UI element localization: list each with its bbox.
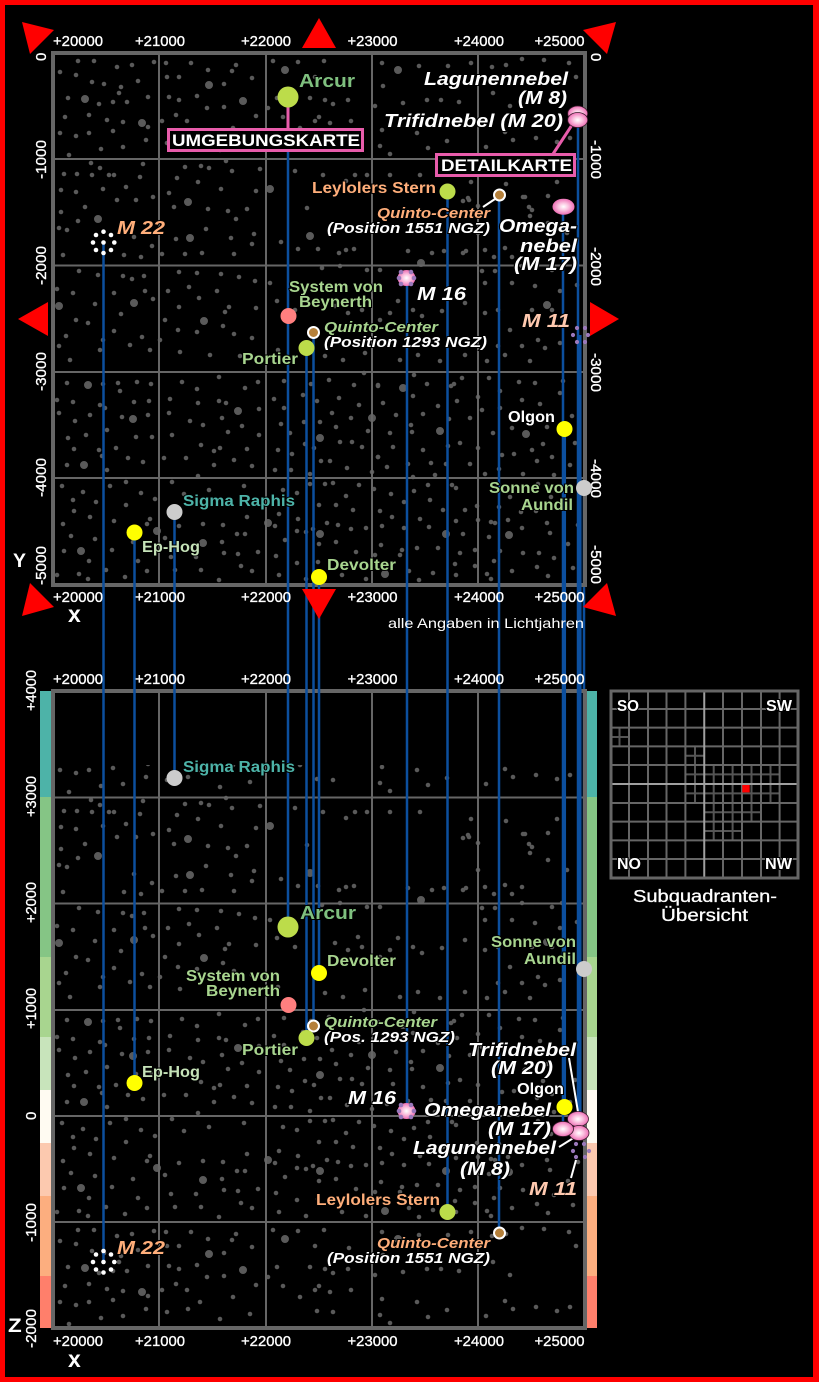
quadrant labels: NW bbox=[765, 856, 792, 873]
star: Olgon lower: Olgon bbox=[517, 1081, 564, 1098]
nebula: Trifidnebel lower: (M 20) bbox=[491, 1058, 553, 1078]
cluster: M 11 bbox=[522, 311, 590, 344]
star: Portier: Portier bbox=[242, 351, 298, 368]
nebula: Omeganebel bbox=[499, 199, 578, 274]
star: Devolter: Devolter bbox=[327, 557, 396, 574]
star: Olgon bbox=[508, 409, 572, 437]
nebula: Lagunennebel: Lagunennebel bbox=[424, 69, 569, 89]
star: System von Beynerth lower: System von bbox=[186, 968, 280, 985]
Quinto-Center 1293 lower bbox=[308, 1014, 455, 1046]
x axis labels XZ top: +21000 bbox=[135, 671, 185, 688]
x axis labels XZ bottom: +21000 bbox=[135, 1333, 185, 1350]
x axis labels XY bottom: +25000 bbox=[534, 589, 584, 606]
nebula: Lagunennebel lower: (M 8) bbox=[460, 1159, 510, 1179]
z axis labels: 0 bbox=[23, 1112, 40, 1120]
nebula: M 16: M 16 bbox=[417, 284, 467, 304]
z axis labels: -2000 bbox=[23, 1309, 40, 1348]
y axis labels right: -1000 bbox=[587, 140, 604, 179]
quadrant labels bbox=[617, 698, 792, 873]
star: System von Beynerth: System von bbox=[289, 279, 383, 296]
nebula: Omeganebel: Omega- bbox=[499, 216, 577, 236]
x axis labels XY bottom: +23000 bbox=[348, 589, 398, 606]
z axis labels: +2000 bbox=[23, 882, 40, 923]
star: Leylolers Stern lower bbox=[316, 1192, 456, 1220]
cluster: M 11: M 11 bbox=[522, 311, 570, 331]
cluster: M 22 lower bbox=[91, 1238, 165, 1275]
nebula: Lagunennebel: (M 8) bbox=[518, 88, 567, 108]
Quinto-Center 1551 lower: (Position 1551 NGZ) bbox=[327, 1250, 490, 1267]
x axis labels XY bottom: +21000 bbox=[135, 589, 185, 606]
cluster: M 22 bbox=[91, 218, 165, 255]
Quinto-Center 1551: Quinto-Center bbox=[377, 205, 491, 222]
y axis labels right: 0 bbox=[587, 53, 604, 61]
x axis labels XZ top: +23000 bbox=[348, 671, 398, 688]
x axis labels XZ top: +20000 bbox=[53, 671, 103, 688]
x axis labels XY top bbox=[53, 33, 584, 50]
detailkarte callout bbox=[436, 125, 574, 176]
star: Ep-Hog: Ep-Hog bbox=[142, 539, 200, 556]
quadrant labels: SW bbox=[766, 698, 792, 715]
star: Sigma Raphis lower bbox=[166, 759, 295, 786]
y axis labels left: -2000 bbox=[33, 246, 50, 285]
x axis labels XY top: +23000 bbox=[348, 33, 398, 50]
star: Olgon lower bbox=[517, 1081, 572, 1115]
y axis labels right: -5000 bbox=[587, 545, 604, 584]
x axis labels XY bottom: +22000 bbox=[241, 589, 291, 606]
x axis labels XY bottom bbox=[53, 589, 584, 606]
star: System von Beynerth lower bbox=[186, 968, 296, 1013]
star: Devolter lower bbox=[311, 953, 396, 981]
star: Portier lower bbox=[242, 1030, 314, 1059]
quadrant labels: NO bbox=[617, 856, 641, 873]
XY objects bbox=[91, 69, 592, 585]
position line: Sonne von Aundil bbox=[583, 488, 585, 969]
star: Ep-Hog lower: Ep-Hog bbox=[142, 1064, 200, 1081]
umgebungskarte callout: UMGEBUNGSKARTE bbox=[172, 131, 360, 150]
star: Arcur lower: Arcur bbox=[300, 902, 356, 923]
star: Portier bbox=[242, 340, 314, 368]
x axis labels XZ top: +24000 bbox=[454, 671, 504, 688]
y axis labels right: -3000 bbox=[587, 353, 604, 392]
x axis labels XZ bottom: +24000 bbox=[454, 1333, 504, 1350]
nebula: Omeganebel: nebel bbox=[520, 236, 578, 256]
z colour bar right bbox=[587, 691, 597, 1328]
x axis labels XZ bottom: +20000 bbox=[53, 1333, 103, 1350]
x axis labels XY top: +25000 bbox=[534, 33, 584, 50]
star: Sigma Raphis: Sigma Raphis bbox=[183, 493, 295, 510]
x axis labels XY top: +24000 bbox=[454, 33, 504, 50]
z axis labels: +1000 bbox=[23, 988, 40, 1029]
current sector marker bbox=[742, 785, 750, 792]
overview caption: Subquadranten- bbox=[633, 886, 777, 906]
x axis labels XY top: +22000 bbox=[241, 33, 291, 50]
star: Leylolers Stern bbox=[312, 180, 456, 200]
cluster: M 22 lower: M 22 bbox=[117, 1238, 165, 1258]
panel: XY grid bbox=[53, 53, 585, 585]
x axis labels XZ bottom: +25000 bbox=[534, 1333, 584, 1350]
x axis labels XY bottom: +24000 bbox=[454, 589, 504, 606]
star: Arcur lower bbox=[278, 902, 356, 938]
nebula: Omeganebel lower: Omeganebel bbox=[424, 1100, 552, 1120]
y axis labels left: -4000 bbox=[33, 458, 50, 497]
Quinto-Center 1293 bbox=[308, 319, 487, 351]
Quinto-Center 1293: Quinto-Center bbox=[324, 319, 439, 336]
y axis labels left: -5000 bbox=[33, 546, 50, 585]
x axis labels XZ bottom bbox=[53, 1333, 584, 1350]
panel: Subquadranten overview bbox=[610, 690, 798, 925]
z axis labels: +4000 bbox=[23, 670, 40, 711]
nebula: Lagunennebel bbox=[424, 69, 588, 121]
nebula: M 16 lower bbox=[348, 1088, 416, 1119]
note: units: alle Angaben in Lichtjahren bbox=[388, 615, 584, 631]
cluster: M 22: M 22 bbox=[117, 218, 165, 238]
panel: XZ grid bbox=[53, 691, 585, 1328]
star: System von Beynerth bbox=[280, 279, 383, 324]
z axis labels: +3000 bbox=[23, 776, 40, 817]
cluster: M 11 lower: M 11 bbox=[529, 1179, 577, 1199]
axis letter Z: Z bbox=[8, 1315, 22, 1337]
y axis labels left: -1000 bbox=[33, 140, 50, 179]
y axis labels right bbox=[587, 53, 604, 584]
x axis labels XZ top: +22000 bbox=[241, 671, 291, 688]
Quinto-Center 1293 lower: (Pos. 1293 NGZ) bbox=[324, 1029, 455, 1046]
star: Ep-Hog lower bbox=[126, 1064, 200, 1091]
Quinto-Center 1293: (Position 1293 NGZ) bbox=[324, 334, 487, 351]
Quinto-Center 1551 lower: Quinto-Center bbox=[377, 1235, 491, 1252]
star: System von Beynerth lower: Beynerth bbox=[206, 983, 280, 1000]
y axis labels left bbox=[33, 53, 50, 585]
x axis labels XZ top: +25000 bbox=[534, 671, 584, 688]
star: Arcur: Arcur bbox=[299, 70, 355, 91]
nebula: Trifidnebel: Trifidnebel (M 20) bbox=[384, 111, 563, 131]
x axis labels XZ bottom: +22000 bbox=[241, 1333, 291, 1350]
Quinto-Center 1551 lower bbox=[327, 1228, 505, 1267]
star: Portier lower: Portier bbox=[242, 1042, 298, 1059]
x axis labels XZ top bbox=[53, 671, 584, 688]
red arrows bbox=[18, 18, 619, 619]
nebula: Omeganebel: (M 17) bbox=[514, 254, 577, 274]
star: Leylolers Stern lower: Leylolers Stern bbox=[316, 1192, 440, 1209]
star: Sonne von Aundil: Aundil bbox=[521, 497, 573, 514]
axis letter Y: Y bbox=[13, 550, 26, 572]
nebula: Lagunennebel lower: Lagunennebel bbox=[413, 1138, 557, 1158]
z colour bar left bbox=[40, 691, 51, 1328]
y axis labels left: -3000 bbox=[33, 352, 50, 391]
y axis labels right: -2000 bbox=[587, 247, 604, 286]
y axis labels right: -4000 bbox=[587, 459, 604, 498]
star: Sigma Raphis lower: Sigma Raphis bbox=[183, 759, 295, 776]
nebula: M 16 bbox=[397, 270, 467, 304]
quadrant labels: SO bbox=[617, 698, 639, 715]
nebula: Lagunennebel lower bbox=[413, 1126, 589, 1179]
panel: XY starfield bbox=[57, 59, 578, 580]
star: Devolter lower: Devolter bbox=[327, 953, 396, 970]
x axis labels XZ bottom: +23000 bbox=[348, 1333, 398, 1350]
cluster: M 11 lower bbox=[529, 1142, 591, 1199]
umgebungskarte callout bbox=[168, 100, 362, 150]
Quinto-Center 1551: (Position 1551 NGZ) bbox=[327, 220, 490, 237]
Quinto-Center 1293 lower: Quinto-Center bbox=[324, 1014, 438, 1031]
x axis labels XY top: +21000 bbox=[135, 33, 185, 50]
star: Devolter bbox=[311, 557, 396, 585]
x axis labels XY bottom: +20000 bbox=[53, 589, 103, 606]
star: Ep-Hog bbox=[126, 524, 200, 556]
star: Arcur bbox=[278, 70, 355, 108]
Quinto-Center 1551 bbox=[327, 190, 505, 237]
x axis labels XY top: +20000 bbox=[53, 33, 103, 50]
star: Sonne von Aundil lower bbox=[491, 934, 592, 977]
z axis labels: -1000 bbox=[23, 1203, 40, 1242]
axis letter x top: x bbox=[68, 601, 81, 627]
nebula: M 16 lower: M 16 bbox=[348, 1088, 397, 1108]
star: Olgon: Olgon bbox=[508, 409, 555, 426]
nebula: Omeganebel lower bbox=[424, 1100, 574, 1139]
z axis labels bbox=[23, 670, 40, 1348]
panel: XZ starfield bbox=[57, 696, 578, 1324]
y axis labels left: 0 bbox=[33, 53, 50, 61]
nebula: Trifidnebel lower: Trifidnebel bbox=[468, 1040, 577, 1060]
star: Sigma Raphis bbox=[166, 493, 295, 520]
overview caption: Übersicht bbox=[661, 905, 748, 925]
nebula: Trifidnebel lower bbox=[468, 1040, 588, 1126]
position lines linking both maps bbox=[104, 120, 580, 1262]
star: Sonne von Aundil lower: Sonne von bbox=[491, 934, 576, 951]
overview caption bbox=[633, 886, 777, 925]
nebula: Omeganebel lower: (M 17) bbox=[488, 1119, 551, 1139]
star: System von Beynerth: Beynerth bbox=[299, 294, 372, 311]
star: Sonne von Aundil: Sonne von bbox=[489, 480, 574, 497]
star: Sonne von Aundil bbox=[489, 480, 592, 514]
XZ objects bbox=[91, 759, 592, 1275]
axis letter x bottom: x bbox=[68, 1346, 81, 1372]
detailkarte callout: DETAILKARTE bbox=[441, 156, 572, 175]
star: Sonne von Aundil lower: Aundil bbox=[524, 951, 576, 968]
star: Leylolers Stern: Leylolers Stern bbox=[312, 180, 436, 197]
overview grid bbox=[610, 690, 798, 878]
